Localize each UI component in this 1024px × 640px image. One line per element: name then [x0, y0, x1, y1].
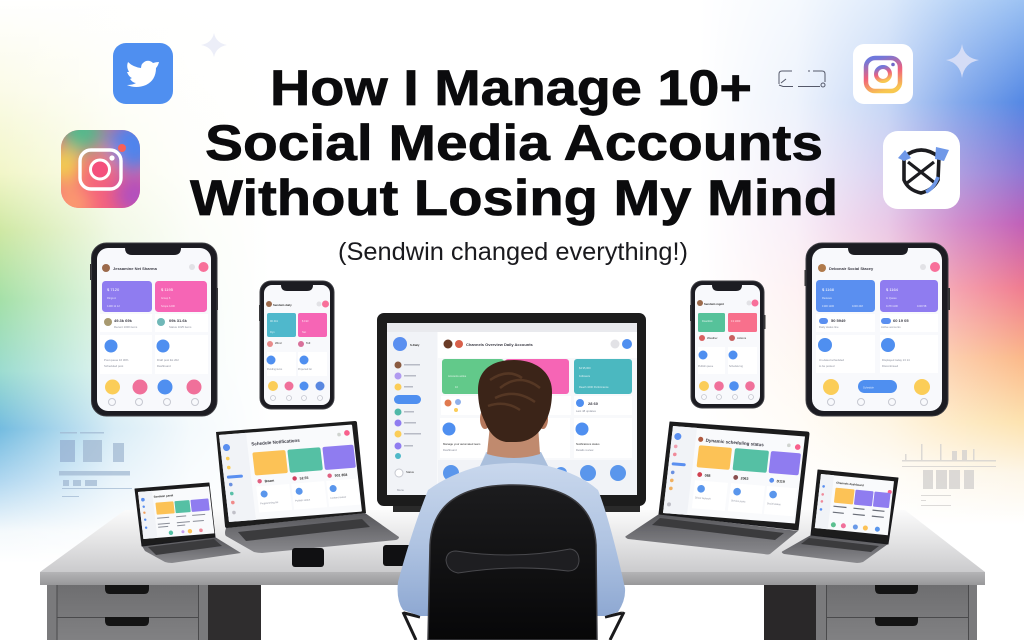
monitor card teal: [574, 359, 632, 394]
monitor: 28 60: [588, 401, 599, 406]
monitor card pink: [505, 359, 569, 394]
phone header name: Sendwin daily: [273, 303, 292, 307]
white list cards: Un-dated scheduled: [819, 358, 844, 362]
chair lumbar handle: [446, 549, 579, 573]
shirt: [398, 452, 625, 616]
desk: [40, 510, 985, 640]
phone: small left: Toll: [306, 341, 311, 345]
phone: small left: [259, 281, 334, 409]
card pink: Net: [302, 330, 306, 334]
phone: small right: Publish queue: [698, 365, 714, 368]
card purple: 1030 58: [917, 304, 927, 308]
card pink: $ 193: [302, 319, 309, 323]
phone: small right: Weather: [707, 336, 718, 340]
monitor: [377, 313, 646, 512]
monitor lower cards: Manage your automated team: [443, 442, 481, 446]
title: [190, 60, 838, 226]
person seen from behind: [398, 360, 625, 640]
laptop: large right: [625, 422, 809, 554]
phone: large right: [804, 243, 950, 416]
card pink: [298, 313, 327, 337]
wireframe decoration left: [59, 432, 132, 497]
white list cards: Scheduled post: [104, 364, 124, 368]
phone header name: Sendwin mgmt: [704, 302, 724, 306]
card purple: 1178 1100: [886, 304, 898, 308]
laptop: large left: [216, 421, 399, 553]
laptop screen UI: Sendwin panel: [153, 493, 174, 499]
sparkle right: [946, 44, 979, 78]
smartphone on desk left: [292, 548, 324, 567]
card teal: [267, 313, 296, 337]
monitor sidebar: Menu: [397, 488, 404, 492]
monitor card green: Accounts active: [448, 374, 467, 378]
card purple: [102, 281, 152, 312]
right cabinet: [764, 585, 977, 640]
desk top surface: [40, 510, 985, 572]
card purple: In Queue: [886, 296, 897, 300]
white list cards: [100, 335, 208, 374]
laptop screen UI: Programming list: [260, 501, 279, 505]
laptop screen UI: Beam: [264, 479, 274, 483]
icon: instagram white tile: [853, 44, 913, 104]
phone: large left: [90, 243, 218, 416]
hair: [478, 360, 552, 442]
laptop screen UI: Dynamic scheduling status: [705, 438, 765, 447]
card purple: $ 1164: [886, 287, 899, 292]
title line 1: How I Manage 10+: [270, 60, 752, 116]
monitor card teal: Reach 1000 Performance: [579, 385, 609, 389]
phone: large left: 49.3k 69k: [114, 318, 133, 323]
white list cards: Draft post list 202: [157, 358, 179, 362]
card purple: Rings A: [107, 296, 116, 300]
monitor card teal: $4 95,000: [579, 366, 591, 370]
laptop screen UI: [663, 426, 805, 524]
card pink: Group 6: [161, 296, 171, 300]
phone: large right: 50 5949: [831, 318, 846, 323]
phone: large right: Active accounts: [881, 325, 901, 329]
phone: small right: Schedule log: [729, 365, 743, 368]
laptop screen UI: D119: [776, 479, 785, 484]
laptop: small right: [782, 470, 898, 563]
card pink: $ 1195: [161, 287, 174, 292]
white list cards: Post queue 16 30%: [104, 358, 129, 362]
bottom action buttons: Schedule: [863, 386, 874, 390]
laptop screen UI: Social status: [767, 502, 782, 506]
icon: twitter: [113, 43, 173, 104]
laptop screen UI: Schedule Notifications: [251, 438, 301, 447]
title line 3: Without Losing My Mind: [190, 170, 838, 226]
white list cards: Dashboard: [157, 364, 171, 368]
card blue: Reviews: [822, 296, 833, 300]
card blue: [816, 280, 875, 312]
bottom action buttons: [268, 381, 324, 391]
white list cards: Displayed today 13 14: [882, 358, 910, 362]
ears: [480, 409, 548, 429]
card purple: 1400 11 12: [107, 304, 120, 308]
monitor card green: 10: [455, 385, 458, 389]
card pink: Scope 1200: [161, 304, 175, 308]
white list cards: Discontinued: [882, 364, 899, 368]
left cabinet: [47, 585, 261, 640]
laptop screen UI: 52.55: [299, 476, 309, 481]
card green: Downlink: [702, 319, 713, 323]
laptop screen UI: Direct Network: [695, 496, 712, 501]
bottom action buttons: [823, 379, 930, 395]
monitor lower cards: Notifications status: [576, 442, 600, 446]
desk front edge: [40, 572, 985, 585]
chair legs: [403, 612, 624, 640]
laptop screen UI: [219, 424, 362, 522]
monitor lower cards: [440, 418, 632, 458]
office chair back: [428, 485, 597, 640]
phone header name: Debonair Social Stacey: [829, 266, 874, 271]
laptop screen UI: Publish status: [295, 498, 311, 503]
icon: instagram gradient: [61, 130, 140, 208]
phone: large right: 60 19 05: [893, 318, 909, 323]
phone: large left: 09k 31.6k: [169, 318, 188, 323]
phone: small left: Projected list: [298, 368, 312, 371]
phone header name: Jessamine Net Sharma: [113, 266, 158, 271]
phone: small right: [690, 281, 766, 408]
white list cards: [816, 335, 938, 373]
laptop: small left: [135, 483, 241, 563]
laptop screen UI: Service posts: [731, 499, 746, 503]
card teal: Dyn: [270, 330, 275, 334]
card blue: 1030 248: [852, 304, 863, 308]
wireframe decoration right: [902, 444, 996, 506]
monitor card green: [442, 359, 504, 394]
laptop screen UI: Channels dashboard: [836, 481, 864, 487]
bottom action buttons: [105, 380, 202, 394]
card teal: 90 441: [270, 319, 278, 323]
laptop screen UI: 088: [704, 473, 711, 478]
phone: large right: Daily status line: [819, 325, 839, 329]
phone: small right: Actions: [737, 336, 747, 340]
subtitle: (Sendwin changed everything!): [338, 238, 688, 266]
monitor card teal: Followers: [579, 374, 591, 378]
monitor sidebar: S-Daily: [410, 343, 420, 347]
sparkle left: [201, 33, 227, 57]
card blue: 1300 1100: [822, 304, 835, 308]
laptop screen UI: Content review: [330, 496, 347, 500]
phone: large left: Status 1025 items: [169, 325, 192, 329]
monitor bottom icons: [443, 465, 626, 481]
smartphone on desk right: [383, 545, 412, 566]
icon: sendwin shield logo: [883, 131, 960, 209]
white list cards: to be posted: [819, 364, 835, 368]
monitor sidebar: [387, 332, 437, 495]
monitor lower cards: Dashboard: [443, 448, 457, 452]
card purple: [880, 280, 938, 312]
monitor sidebar: Status: [406, 470, 415, 474]
card pink: [155, 281, 207, 312]
monitor lower cards: Details review: [576, 448, 594, 452]
phone: large left: Recent 1000 items: [114, 325, 138, 329]
laptop screen UI: 901 858: [334, 473, 348, 478]
phone: small left: Pending items: [267, 368, 283, 371]
card coral: 13 1000: [731, 319, 741, 323]
icon: wireframe outline: [779, 71, 825, 87]
monitor: Last 48 updates: [576, 409, 597, 413]
neck: [487, 425, 540, 458]
card purple: $ 7120: [107, 287, 120, 292]
bottom action buttons: [699, 381, 755, 391]
laptop screen UI: 2063: [740, 476, 749, 481]
phone: small left: Wind: [275, 341, 282, 345]
title line 2: Social Media Accounts: [205, 115, 823, 171]
monitor header text: Channels Overview Daily Accounts: [466, 342, 534, 347]
card blue: $ 1168: [822, 287, 835, 292]
